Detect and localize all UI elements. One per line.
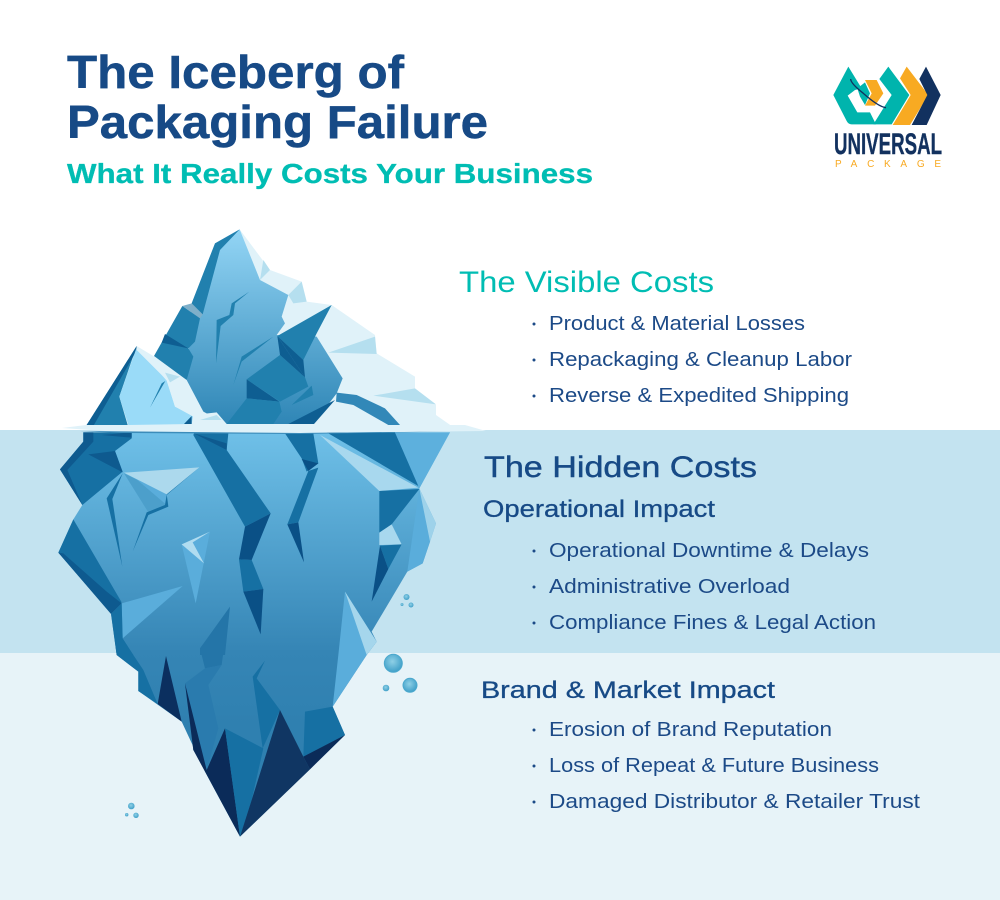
list: visible costs: Repackaging & Cleanup Labor <box>549 348 852 371</box>
list: visible costs: Product & Material Losses <box>549 312 805 335</box>
waterline ice shelf <box>62 425 486 434</box>
list: brand and market impact: Erosion of Brand Reputation <box>549 718 832 741</box>
subheading: operational impact: Operational Impact <box>483 496 715 523</box>
logo: Universal Package <box>833 67 942 170</box>
subtitle: What It Really Costs Your Business <box>67 158 593 189</box>
iceberg: visible tip <box>86 229 455 428</box>
logo: Universal Package: PACKAGE <box>835 159 941 170</box>
iceberg: submerged part <box>58 432 450 837</box>
band: upper water <box>0 430 1000 653</box>
heading: the hidden costs: The Hidden Costs <box>484 451 757 484</box>
list: brand and market impact: Damaged Distributor & Retailer Trust <box>549 790 920 813</box>
bubbles: lower left cluster <box>125 803 139 818</box>
list: operational impact: Compliance Fines & Legal Action <box>549 611 876 634</box>
heading: the visible costs: The Visible Costs <box>459 266 714 299</box>
bubbles: right cluster <box>383 654 417 692</box>
subheading: brand and market impact: Brand & Market Impact <box>481 677 775 704</box>
title <box>67 46 488 148</box>
title: The Iceberg of <box>67 46 405 98</box>
bubbles: small upper cluster <box>400 594 414 608</box>
background: white sky <box>0 0 1000 430</box>
list: operational impact <box>532 539 876 634</box>
list: brand and market impact: Loss of Repeat & Future Business <box>549 754 879 777</box>
band: deep water <box>0 653 1000 900</box>
list: operational impact: Administrative Overload <box>549 575 790 598</box>
list: operational impact: Operational Downtime & Delays <box>549 539 869 562</box>
list: visible costs <box>532 312 852 407</box>
list: brand and market impact <box>532 718 920 813</box>
title: Packaging Failure <box>67 96 488 148</box>
list: visible costs: Reverse & Expedited Shipping <box>549 384 849 407</box>
